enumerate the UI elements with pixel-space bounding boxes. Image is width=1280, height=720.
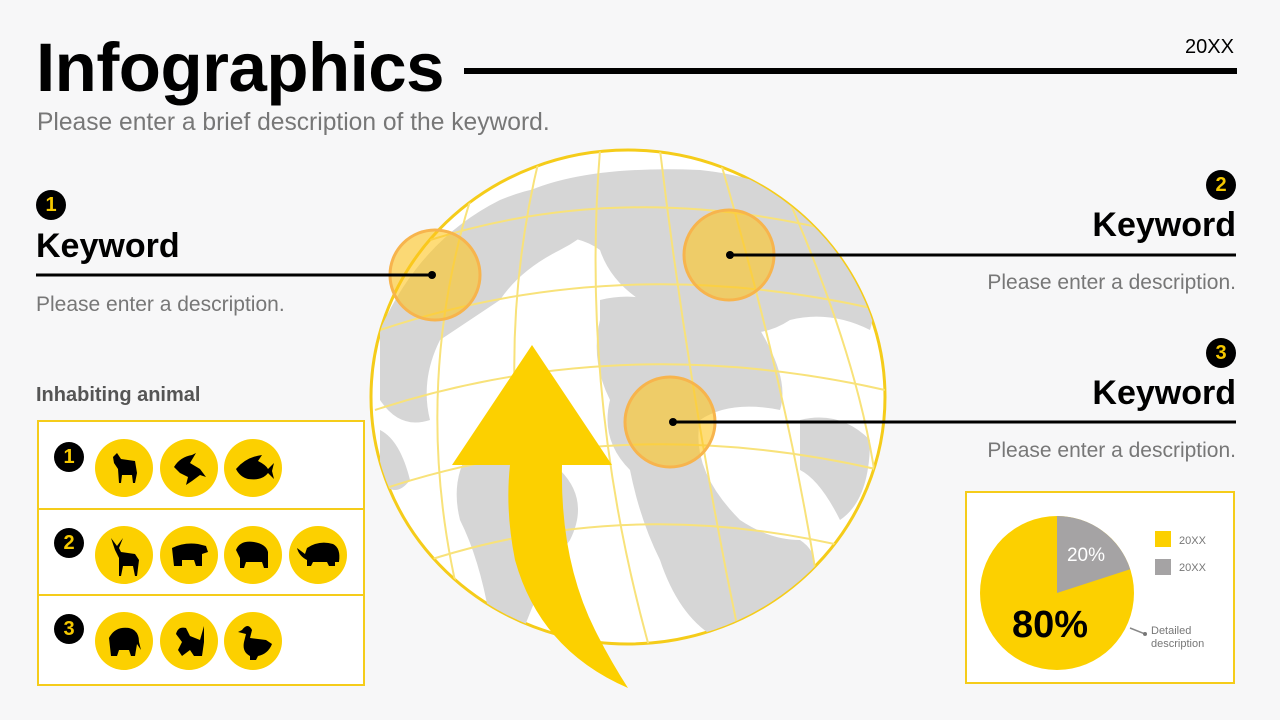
row 1: 1: [63, 446, 75, 468]
title rule: [464, 68, 1237, 74]
keyword 3: Please enter a description.: [987, 439, 1236, 462]
callout: [1130, 625, 1204, 650]
keyword 3: Keyword: [1092, 374, 1236, 412]
row 2: 2: [63, 532, 75, 554]
callout: description: [1151, 638, 1204, 650]
globe: [36, 148, 1236, 688]
pie chart panel: [965, 491, 1235, 684]
keyword 2: Keyword: [1092, 206, 1236, 244]
row 2: [37, 508, 365, 596]
year label: 20XX: [1185, 36, 1234, 58]
animals table: [37, 420, 365, 686]
keyword 3: [987, 338, 1236, 462]
arrow: [452, 345, 628, 688]
keyword 1: 1: [45, 194, 57, 216]
row 1: [37, 420, 365, 510]
keyword 1: Keyword: [36, 227, 180, 265]
row 3: 3: [63, 618, 75, 640]
pie: 20%: [1067, 545, 1105, 566]
title: Infographics: [36, 29, 444, 106]
keyword 2: Please enter a description.: [987, 271, 1236, 294]
legend: [1155, 531, 1207, 575]
subtitle: Please enter a brief description of the keyword.: [37, 109, 550, 136]
keyword 2: [987, 170, 1236, 294]
pie: [980, 516, 1134, 670]
callout: Detailed: [1151, 625, 1191, 637]
keyword 1: Please enter a description.: [36, 293, 285, 316]
keyword 3: 3: [1215, 342, 1227, 364]
animals heading: Inhabiting animal: [36, 384, 200, 406]
pie: 80%: [1012, 604, 1088, 646]
keyword 2: 2: [1215, 174, 1227, 196]
highlight circles: [390, 210, 774, 467]
keyword 1: [36, 190, 285, 316]
legend: 20XX: [1179, 535, 1207, 547]
row 3: [37, 594, 365, 686]
legend: 20XX: [1179, 562, 1207, 574]
connector lines: [36, 255, 1236, 422]
